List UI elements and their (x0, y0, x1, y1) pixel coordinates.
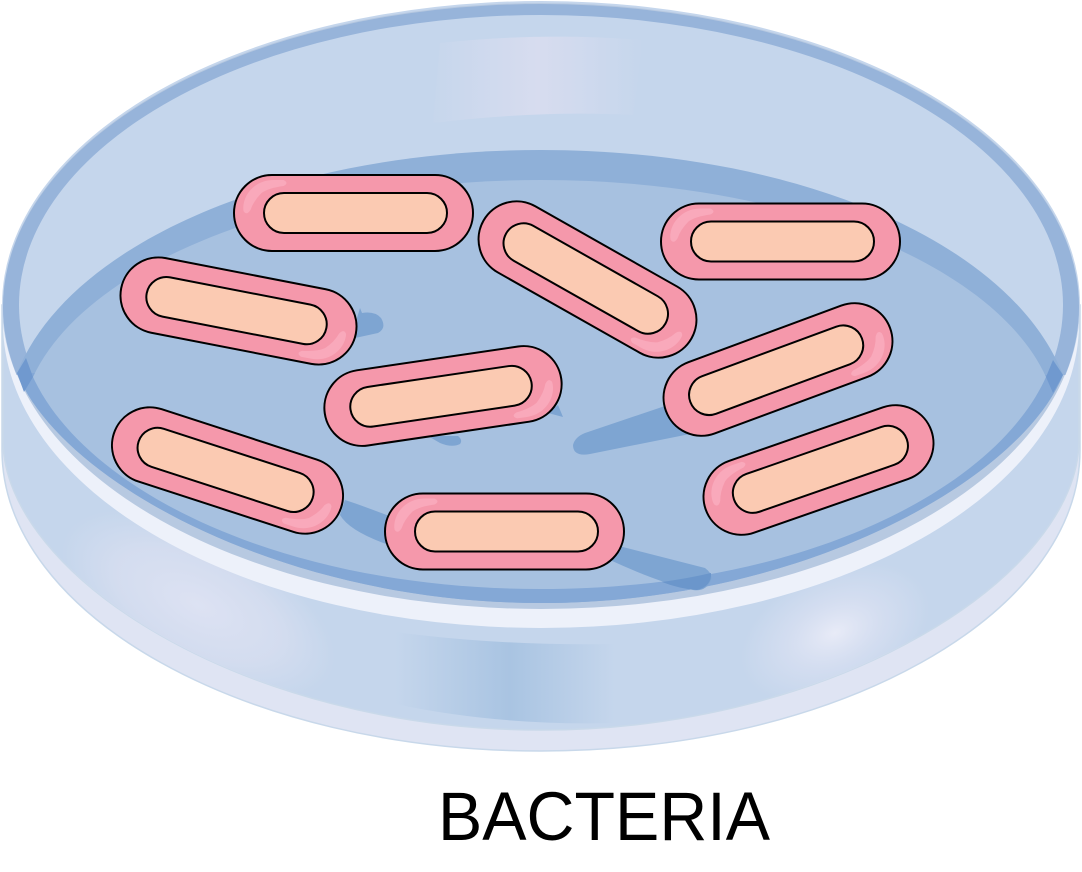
grey rim shadow (3, 3, 1079, 609)
dish lid ring (3, 4, 1079, 375)
agar layer (17, 150, 1063, 603)
bacterium 9 (693, 395, 944, 545)
bacterium 1 (234, 175, 473, 251)
shadows (340, 308, 711, 590)
bacterium 4 (661, 204, 900, 280)
white rim (3, 18, 1079, 628)
bacterium 7 (102, 397, 353, 544)
bacterium 2 (114, 251, 363, 371)
bacterium 8 (385, 494, 624, 570)
dish base (2, 305, 1080, 751)
shadow overlap with rim (662, 573, 711, 590)
lid highlight (433, 37, 643, 123)
bacterium 3 (465, 188, 710, 371)
bacterium 6 (319, 341, 567, 451)
label: BACTERIA: BACTERIA (438, 778, 770, 855)
dish lid outer edge (2, 1, 1080, 375)
bacterium 5 (653, 292, 903, 447)
dish lid inner surface (19, 15, 1063, 595)
